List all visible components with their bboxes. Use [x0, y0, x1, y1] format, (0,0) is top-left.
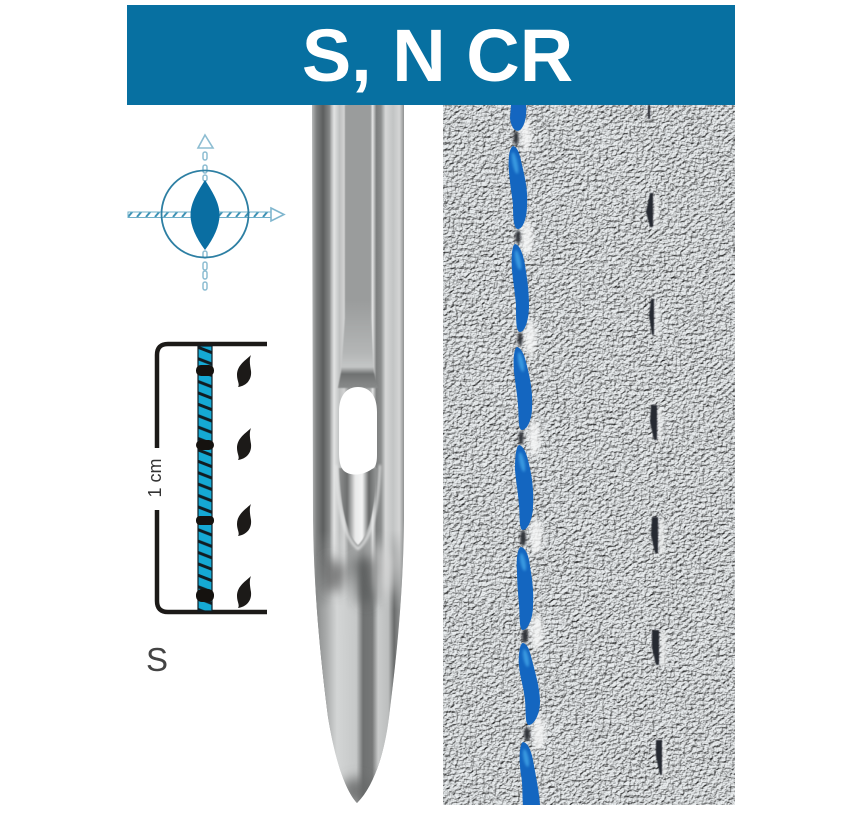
title: S, N CR	[302, 14, 573, 97]
scale label: 1 cm	[145, 458, 165, 498]
needle eye	[339, 387, 377, 475]
thread	[196, 346, 214, 611]
stitch length diagram	[145, 344, 267, 612]
bracket	[157, 344, 267, 612]
point type letter: S	[146, 641, 168, 678]
highlights beside stitching	[521, 118, 545, 751]
needle	[312, 105, 404, 803]
stitch holes	[237, 355, 251, 608]
leather sample photo	[443, 105, 735, 805]
needle punch holes	[646, 105, 666, 776]
upper thread groove	[338, 105, 378, 388]
dark thread entry points	[514, 131, 530, 741]
stitch sheen	[510, 152, 530, 767]
blue stitches	[509, 105, 540, 805]
title banner	[127, 5, 735, 105]
needle point	[314, 536, 404, 803]
lower scarf	[339, 468, 377, 545]
icon: needle point direction diagram	[128, 135, 284, 290]
